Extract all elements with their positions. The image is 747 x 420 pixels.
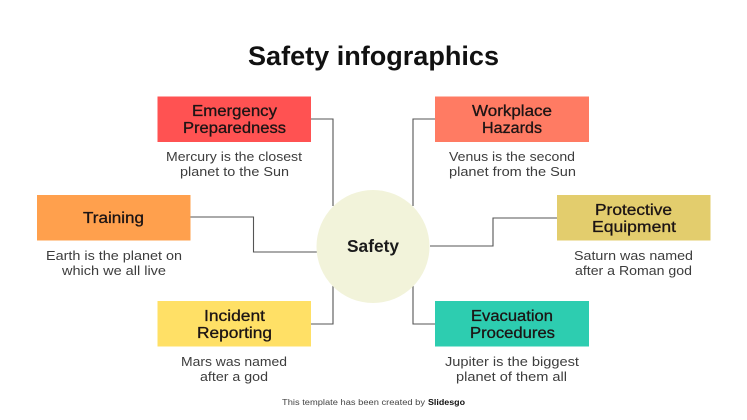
panel: Emergency Preparedness: Preparedness — [183, 120, 286, 137]
footer credit: Slidesgo — [428, 398, 465, 407]
panel: Emergency Preparedness — [158, 96, 311, 179]
panel: Incident Reporting: Reporting — [197, 325, 272, 342]
panel: Emergency Preparedness: planet to the Sun — [180, 165, 289, 179]
panel: Evacuation Procedures: Evacuation — [471, 308, 553, 325]
panel: Evacuation Procedures: planet of them all — [456, 370, 567, 384]
center circle: Safety: Safety — [347, 236, 399, 256]
panel: Workplace Hazards — [435, 96, 589, 179]
panel: Training — [37, 195, 190, 278]
footer credit: This template has been created by — [282, 398, 425, 407]
panel: Protective Equipment: Equipment — [592, 219, 677, 236]
panel: Incident Reporting: Incident — [204, 308, 266, 325]
connector lines — [190, 119, 557, 324]
panel: Evacuation Procedures: Jupiter is the biggest — [445, 355, 580, 369]
footer credit — [282, 398, 465, 407]
panel: Protective Equipment — [557, 195, 710, 278]
panel: Protective Equipment: after a Roman god — [575, 264, 692, 278]
panel: Incident Reporting — [158, 301, 311, 384]
panel: Emergency Preparedness: Emergency — [192, 103, 277, 120]
panel: Incident Reporting: after a god — [200, 370, 268, 384]
panel: Workplace Hazards: Venus is the second — [449, 150, 575, 164]
panel: Protective Equipment: Protective — [595, 202, 672, 219]
panel: Incident Reporting: Mars was named — [181, 355, 287, 369]
panel: Evacuation Procedures — [435, 301, 589, 384]
title: Safety infographics — [248, 41, 499, 71]
panel: Training: Training — [83, 210, 144, 227]
panel: Workplace Hazards: Workplace — [472, 103, 552, 120]
center circle: Safety — [316, 190, 430, 303]
panel: Training: which we all live — [61, 264, 166, 278]
panel: Training: Earth is the planet on — [46, 249, 182, 263]
panel: Workplace Hazards: Hazards — [482, 120, 542, 137]
panel: Workplace Hazards: planet from the Sun — [449, 165, 576, 179]
panel: Protective Equipment: Saturn was named — [574, 249, 693, 263]
panel: Emergency Preparedness: Mercury is the closest — [166, 150, 303, 164]
panel: Evacuation Procedures: Procedures — [470, 325, 555, 342]
